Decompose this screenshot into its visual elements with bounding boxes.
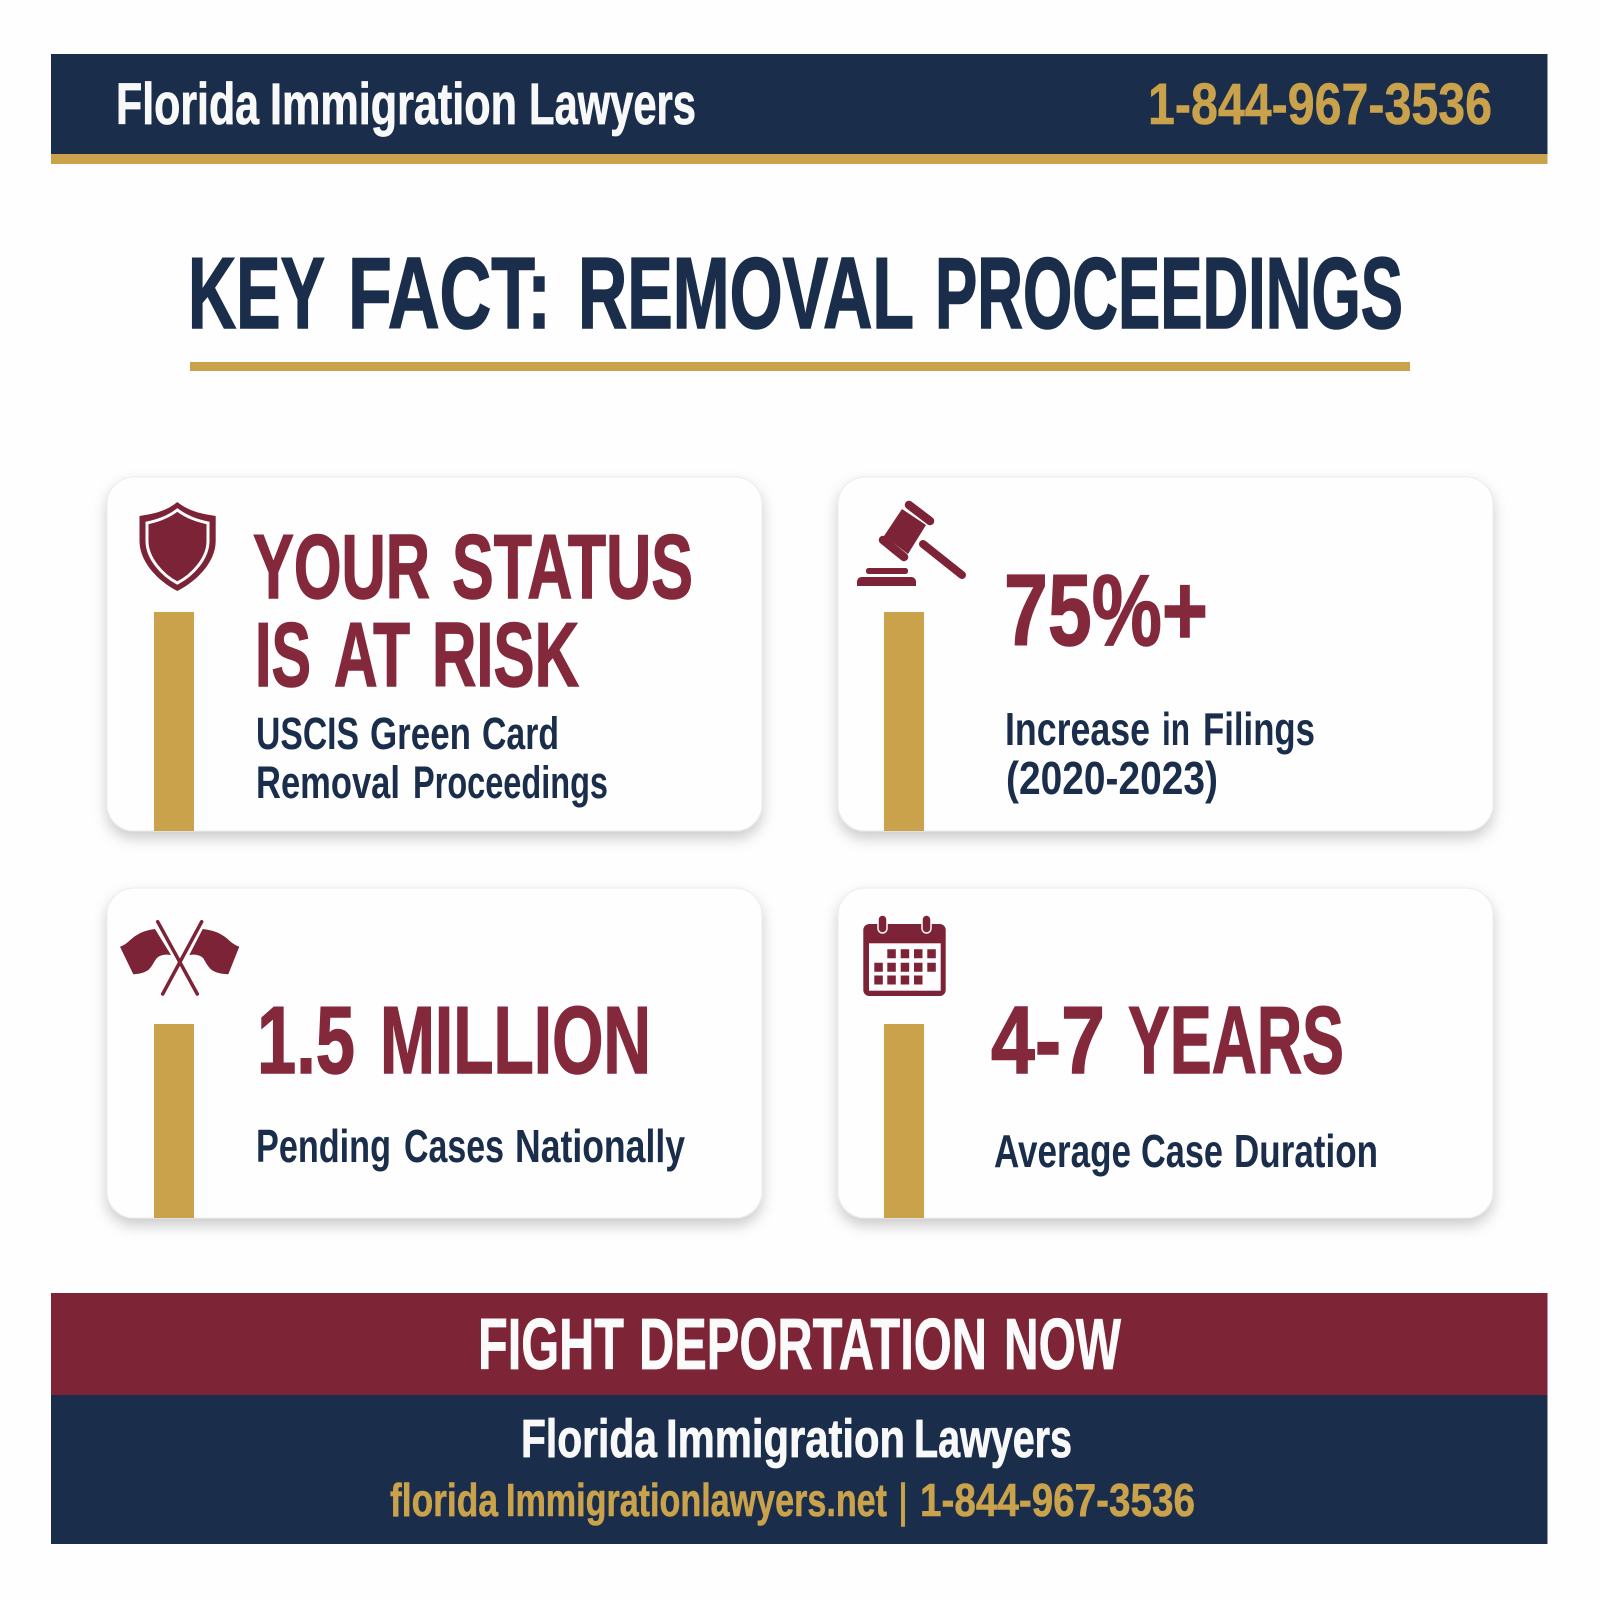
description: green card removal proceedings: Card xyxy=(482,708,559,759)
description: increase in filings: in xyxy=(1162,703,1190,755)
stat: 1.5 million xyxy=(257,987,651,1094)
footer website and phone: Immigrationlawyers.net xyxy=(506,1474,887,1526)
footer website and phone xyxy=(390,1474,1195,1526)
title: KEY xyxy=(188,238,325,350)
panel: your status is at risk xyxy=(107,477,762,831)
icon: calendar xyxy=(863,915,946,996)
footer firm name: Immigration xyxy=(666,1409,905,1469)
description: average case duration: Case xyxy=(1141,1125,1223,1177)
title xyxy=(188,238,1403,350)
description: green card removal proceedings: USCIS xyxy=(256,708,359,759)
description: average case duration: Duration xyxy=(1234,1125,1378,1177)
footer contact panel xyxy=(51,1395,1548,1544)
header firm name: Florida xyxy=(116,72,260,137)
call to action text: DEPORTATION xyxy=(639,1305,987,1385)
footer website and phone: | xyxy=(899,1474,907,1526)
stat: 75 percent plus: 75%+ xyxy=(1004,555,1208,667)
panel: case duration xyxy=(838,888,1493,1218)
description: average case duration: Average xyxy=(994,1125,1131,1177)
footer firm name xyxy=(521,1409,1072,1469)
panel: pending cases xyxy=(107,888,762,1218)
stat: 1.5 million: 1.5 xyxy=(257,987,355,1094)
title: FACT: xyxy=(348,238,551,350)
description: average case duration xyxy=(994,1125,1378,1177)
icon: crossed flags xyxy=(120,922,239,994)
heading: your status is at risk: IS xyxy=(255,605,311,706)
description: increase in filings xyxy=(1005,703,1315,804)
description: increase in filings: (2020-2023) xyxy=(1006,752,1218,804)
footer firm name: Florida xyxy=(521,1409,658,1469)
description: pending cases: Nationally xyxy=(515,1120,685,1172)
call to action text: NOW xyxy=(1004,1305,1121,1385)
gold accent bar xyxy=(884,612,924,831)
gold accent bar xyxy=(884,1024,924,1218)
icon: shield xyxy=(140,502,216,591)
heading: your status is at risk: RISK xyxy=(432,605,579,706)
description: green card removal proceedings xyxy=(256,708,608,808)
footer firm name: Lawyers xyxy=(914,1409,1072,1469)
heading: your status is at risk: YOUR xyxy=(253,517,430,618)
description: green card removal proceedings: Green xyxy=(370,708,471,759)
stat: 4-7 years xyxy=(991,987,1344,1094)
description: increase in filings: Increase xyxy=(1005,703,1150,755)
description: pending cases: Cases xyxy=(404,1120,504,1172)
gold accent bar xyxy=(154,612,194,831)
footer website and phone: 1-844-967-3536 xyxy=(920,1474,1195,1526)
footer website and phone: florida xyxy=(390,1474,498,1526)
description: pending cases: Pending xyxy=(256,1120,391,1172)
description: green card removal proceedings: Proceedings xyxy=(413,757,608,808)
header bar xyxy=(51,54,1548,164)
header firm name: Lawyers xyxy=(529,72,696,137)
stat: 4-7 years: 4-7 xyxy=(991,987,1105,1094)
heading: your status is at risk: STATUS xyxy=(452,517,693,618)
header phone number: 1-844-967-3536 xyxy=(1148,72,1492,137)
header firm name: Immigration xyxy=(270,72,517,137)
heading: your status is at risk: AT xyxy=(334,605,410,706)
stat: 4-7 years: YEARS xyxy=(1128,987,1344,1094)
title: REMOVAL xyxy=(578,238,914,350)
gold accent bar xyxy=(154,1024,194,1218)
description: green card removal proceedings: Removal xyxy=(256,757,400,808)
call to action text: FIGHT xyxy=(478,1305,624,1385)
icon: gavel xyxy=(857,505,962,586)
header firm name xyxy=(116,72,696,137)
stat: 1.5 million: MILLION xyxy=(380,987,651,1094)
heading: your status is at risk xyxy=(253,517,693,706)
panel: increase in filings xyxy=(838,477,1493,831)
description: increase in filings: Filings xyxy=(1203,703,1315,755)
call to action banner xyxy=(51,1293,1548,1395)
description: pending cases xyxy=(256,1120,685,1172)
